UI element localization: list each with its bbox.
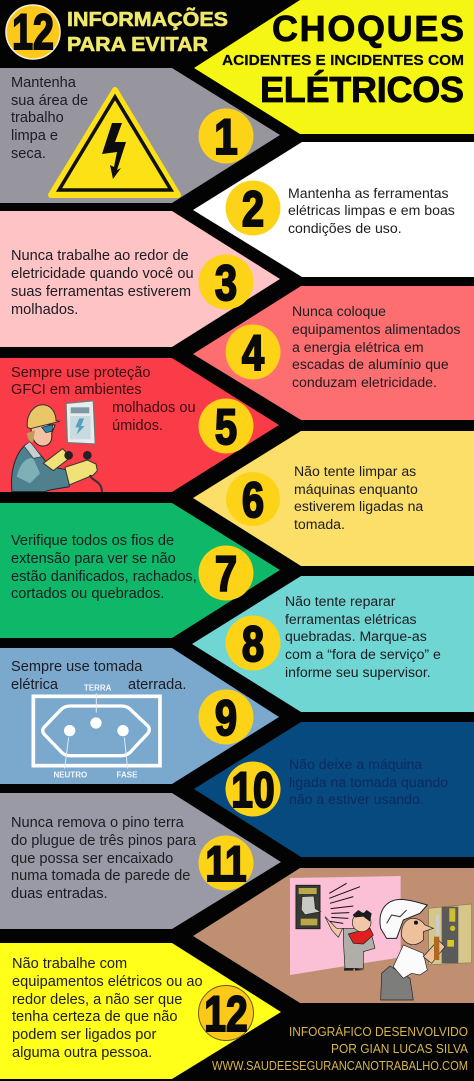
text 9: aterrada. <box>128 677 186 693</box>
panel: illustration of electricians <box>193 868 474 1003</box>
text 12: tenha certeza de que não <box>12 1009 178 1025</box>
diagram: socket <box>33 684 160 780</box>
text 11: Nunca remova o pino terra <box>11 815 185 831</box>
number 8: 8 <box>242 616 264 672</box>
title: acidentes e incidentes com: ACIDENTES E INCIDENTES COM <box>222 53 464 69</box>
text 1: trabalho <box>11 110 64 126</box>
text 1: limpa e <box>11 128 58 144</box>
text 8: quebradas. Marque-as <box>285 628 427 644</box>
text 6: máquinas enquanto <box>294 481 418 497</box>
number 6 <box>226 472 280 528</box>
panel 8: ferramentas quebradas <box>192 576 474 712</box>
number 2: 2 <box>242 181 264 237</box>
text 8: ferramentas elétricas <box>285 611 417 627</box>
number 3: 3 <box>215 255 237 311</box>
header: informações para evitar: INFORMAÇÕES <box>67 7 228 31</box>
text 4: conduzam eletricidade. <box>292 374 437 390</box>
text 10: ligada na tomada quando <box>289 774 448 790</box>
icon: high voltage triangle <box>51 90 178 195</box>
text 12: Não trabalhe com <box>12 956 127 972</box>
text 11: numa tomada de parede de <box>11 868 190 884</box>
text 2: Mantenha as ferramentas <box>288 185 449 201</box>
text 3: molhados. <box>11 302 78 318</box>
text 12: equipamentos elétricos ou ao <box>12 974 203 990</box>
text 4: a energia elétrica em <box>292 339 424 355</box>
text 1: sua área de <box>11 93 88 109</box>
label: neutro: NEUTRO <box>53 771 87 780</box>
header badge: 12: 12 <box>12 5 54 60</box>
panel 10: máquina ligada <box>194 722 474 857</box>
number 9: 9 <box>215 690 237 746</box>
text 11: que possa ser encaixado <box>11 851 173 867</box>
text 2: elétricas limpas e em boas <box>288 202 455 218</box>
illustration: electricians <box>290 876 472 1000</box>
number 5: 5 <box>215 399 237 455</box>
text 12: redor deles, a não ser que <box>12 992 182 1008</box>
header: informações para evitar <box>67 7 228 56</box>
panel 6: limpar máquinas <box>193 431 474 566</box>
text 12: alguma outra pessoa. <box>12 1045 152 1061</box>
text 10: não a estiver usando. <box>289 791 424 807</box>
panel 5: proteção GFCI <box>0 358 279 492</box>
text 5: molhados ou <box>112 400 196 416</box>
text 3: Nunca trabalhe ao redor de <box>11 248 189 264</box>
number 11: 11 <box>205 835 247 892</box>
text 6: tomada. <box>294 516 345 532</box>
panel 2: ferramentas limpas <box>193 142 474 277</box>
number 10: 10 <box>231 761 275 818</box>
text 7: estão danificados, rachados, <box>11 569 197 585</box>
panel 4: escadas de alumínio <box>193 286 474 420</box>
text 8: Não tente reparar <box>285 593 396 609</box>
panel 1: área de trabalho <box>0 68 280 203</box>
text 7: cortados ou quebrados. <box>11 586 164 602</box>
label: fase: FASE <box>117 771 138 780</box>
text 10: Não deixe a máquina <box>289 756 422 772</box>
number 8 <box>226 616 280 672</box>
text 3: suas ferramentas estiverem <box>11 284 191 300</box>
text 1: seca. <box>11 146 46 162</box>
text 9: elétrica <box>11 677 59 693</box>
number 6: 6 <box>242 472 264 528</box>
number 2 <box>226 180 280 237</box>
text 6: estiverem ligadas na <box>294 498 423 514</box>
text 6: Não tente limpar as <box>294 463 416 479</box>
footer credits <box>212 1024 468 1073</box>
text 1: Mantenha <box>11 75 77 91</box>
number 4 <box>226 324 280 381</box>
panel 3: eletricidade molhado <box>0 211 280 347</box>
text 9: Sempre use tomada <box>11 659 143 675</box>
title: elétricos: ELÉTRICOS <box>260 69 464 110</box>
panel 11: pino terra <box>0 793 281 929</box>
number 4: 4 <box>242 325 264 381</box>
panel 7: fios de extensão <box>0 503 280 638</box>
illustration: worker with plug <box>12 401 102 492</box>
header: informações para evitar: PARA EVITAR <box>67 34 209 56</box>
text 3: eletricidade quando você ou <box>11 266 194 282</box>
text 4: equipamentos alimentados <box>292 321 460 337</box>
text 7: Verifique todos os fios de <box>11 533 174 549</box>
text 7: extensão para ver se não <box>11 551 176 567</box>
panel 12: equipamentos ligados <box>0 943 281 1079</box>
text 5: GFCI em ambientes <box>11 382 142 398</box>
text 5: úmidos. <box>112 418 163 434</box>
number 7 <box>198 546 254 602</box>
text 11: do plugue de três pinos para <box>11 833 197 849</box>
number 7: 7 <box>215 546 237 602</box>
text 4: escadas de alumínio que <box>292 356 449 372</box>
panel: title <box>194 0 474 134</box>
number 3 <box>198 254 254 311</box>
text 8: informe seu supervisor. <box>285 664 431 680</box>
title: choques: CHOQUES <box>272 8 464 49</box>
text 4: Nunca coloque <box>292 303 386 319</box>
text 2: condições de uso. <box>288 220 402 236</box>
number 9 <box>198 690 254 746</box>
text 11: duas entradas. <box>11 886 108 902</box>
label: terra: TERRA <box>84 684 112 693</box>
number 1 <box>198 108 254 165</box>
number 5 <box>198 398 254 455</box>
text 12: podem ser ligados por <box>12 1027 157 1043</box>
text 8: com a “fora de serviço” e <box>285 646 441 662</box>
number 1: 1 <box>214 109 238 165</box>
text 5: Sempre use proteção <box>11 365 151 381</box>
number 12: 12 <box>204 985 248 1042</box>
panel 9: tomada aterrada <box>0 648 279 784</box>
